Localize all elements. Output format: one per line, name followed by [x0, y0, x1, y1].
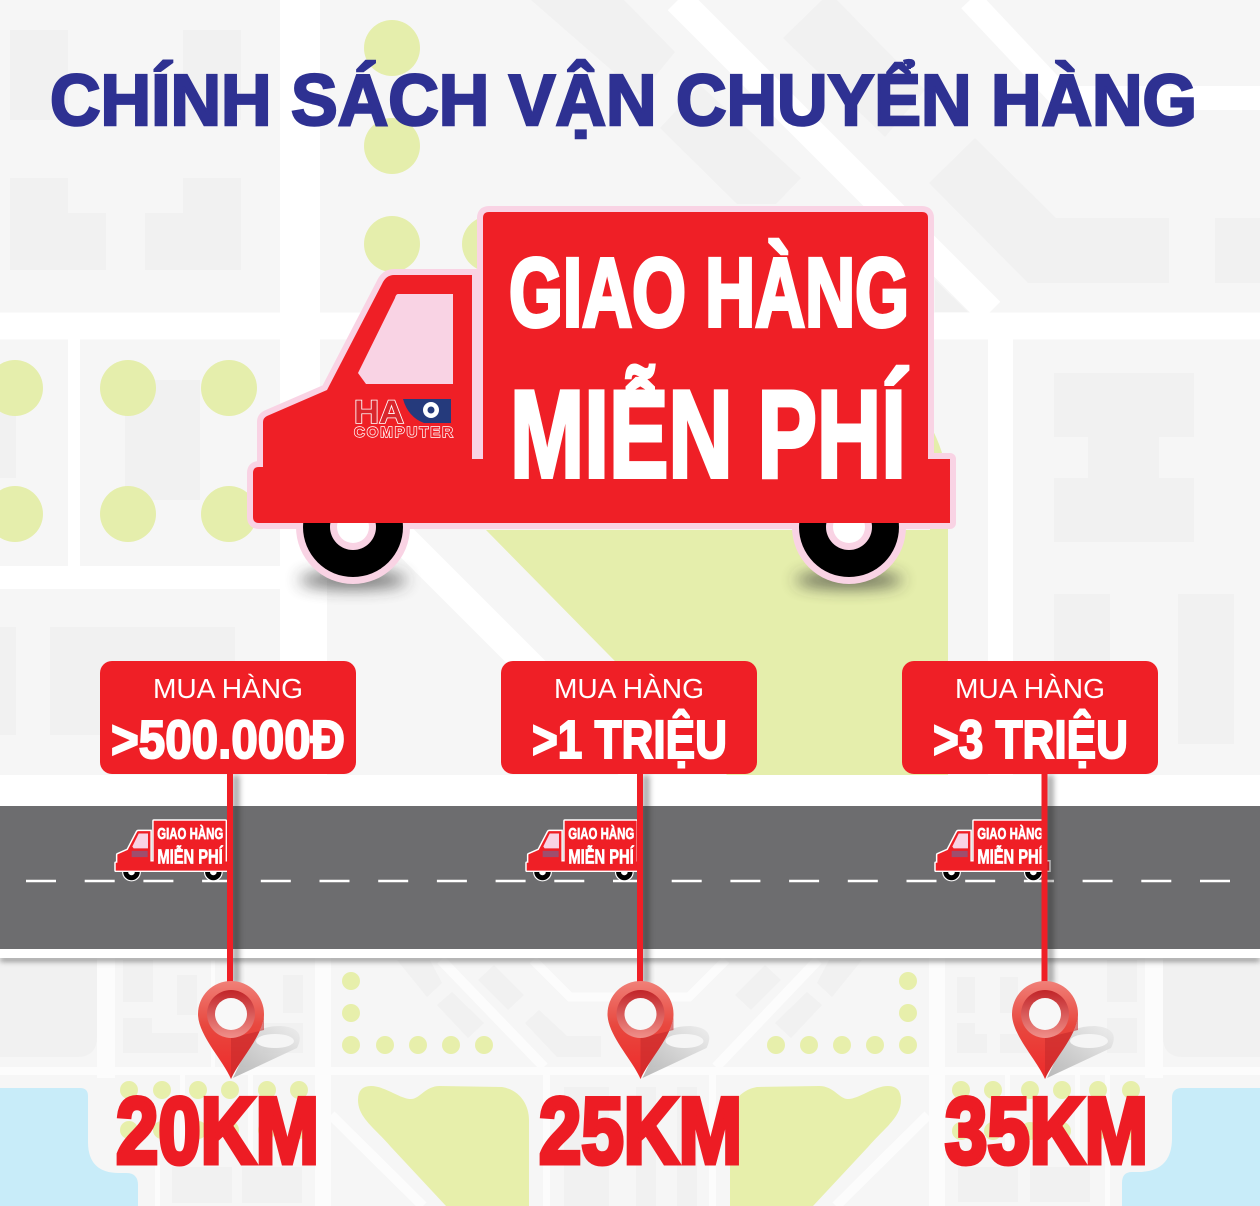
truck text: GIAO HÀNG	[509, 238, 909, 347]
truck outline	[253, 212, 950, 523]
title: CHÍNH SÁCH VẬN CHUYỂN HÀNG	[50, 60, 1197, 141]
road	[0, 775, 1260, 961]
wheels	[296, 470, 906, 584]
small truck 1	[115, 820, 230, 881]
label: over 3 million: >3 TRIỆU	[933, 709, 1128, 770]
small truck 2	[526, 820, 641, 881]
logo: HA	[354, 394, 404, 430]
cab window	[358, 294, 453, 384]
small truck 1: MIỄN PHÍ	[157, 846, 224, 869]
large truck	[253, 212, 950, 588]
pin 2	[608, 981, 709, 1079]
label: over 500.000d: >500.000Đ	[111, 710, 345, 770]
logo	[354, 394, 453, 441]
pin 3	[1012, 981, 1114, 1079]
small truck 3	[935, 820, 1050, 881]
label: over 500.000d: MUA HÀNG	[153, 673, 303, 704]
small truck 3: GIAO HÀNG	[977, 824, 1043, 843]
distance 35km: 35KM	[945, 1078, 1148, 1183]
connector lines	[230, 770, 1050, 985]
distance 25km: 25KM	[539, 1078, 742, 1183]
small truck 2: GIAO HÀNG	[568, 824, 634, 843]
label: over 1 million: >1 TRIỆU	[532, 709, 727, 770]
label: over 1 million: MUA HÀNG	[554, 673, 704, 704]
label: over 1 million	[501, 661, 757, 774]
small truck 2: MIỄN PHÍ	[568, 846, 635, 869]
label: over 3 million	[902, 661, 1158, 774]
distance 20km: 20KM	[116, 1078, 319, 1183]
small truck 3: MIỄN PHÍ	[977, 846, 1044, 869]
green park	[486, 425, 948, 775]
truck body	[253, 212, 950, 523]
label: over 500.000d	[100, 661, 356, 774]
lower map	[0, 958, 1260, 1206]
pin 1	[198, 981, 300, 1079]
large truck: MIỄN PHÍ	[510, 365, 909, 504]
small truck 1: GIAO HÀNG	[157, 824, 223, 843]
label: over 3 million: MUA HÀNG	[955, 673, 1105, 704]
logo: COMPUTER	[354, 424, 453, 441]
